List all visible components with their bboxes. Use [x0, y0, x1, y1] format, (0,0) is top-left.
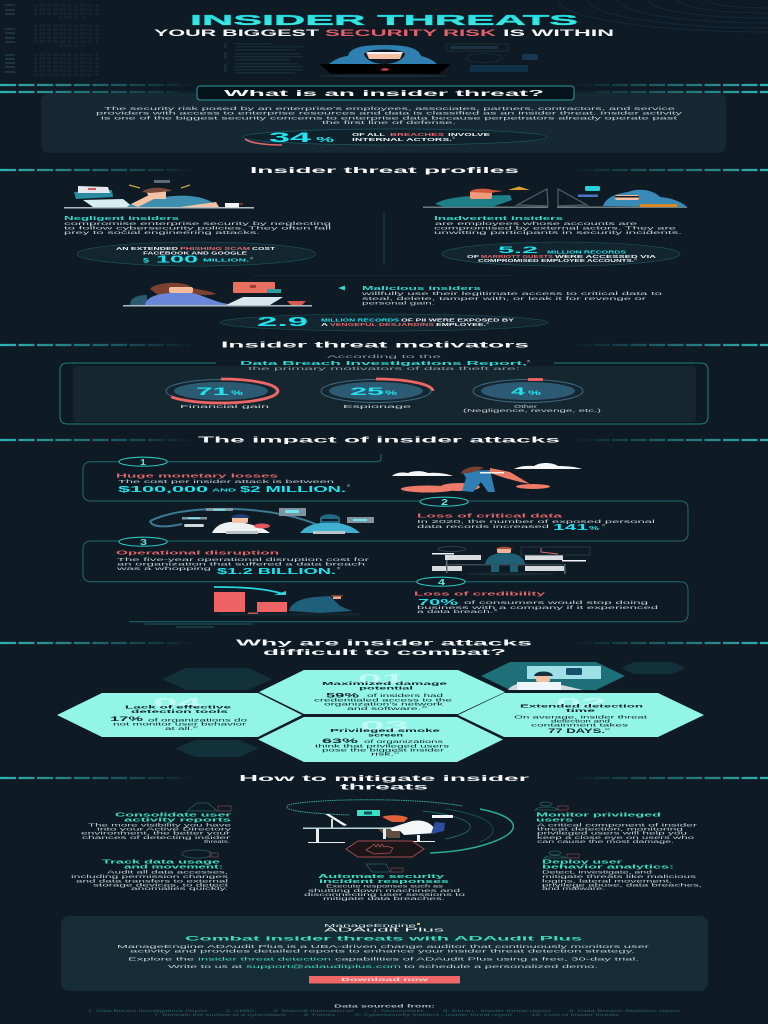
hexagon 03: privileged smoke screen: of organizations — [364, 739, 445, 744]
description: steal, delete, tamper with, or leak it for revenge or — [362, 296, 647, 301]
sources: Data sourced from: — [334, 1004, 436, 1008]
sources: 7. Beneath the surface of a cyberattack — [154, 1013, 287, 1017]
heading: negligent insiders: Negligent insiders — [64, 216, 179, 222]
heading: Combat insider threats with ADAudit Plus — [185, 937, 584, 943]
donut: espionage 25 percent: % — [385, 391, 398, 397]
decorative binary code: 1010011011 — [32, 12, 101, 17]
button: download now — [309, 976, 460, 984]
donut: other 4 percent — [473, 380, 583, 402]
donut: other 4 percent: % — [528, 391, 543, 397]
panel: monitor privileged users — [535, 802, 698, 844]
icon: arrow marker — [338, 286, 345, 290]
hexagon 03: privileged smoke screen: 03 — [360, 718, 409, 733]
heading: Track data usage — [102, 860, 220, 866]
illustration: data thief — [150, 508, 374, 534]
impact 2: critical data — [150, 497, 655, 534]
heading: Deploy user — [542, 860, 622, 866]
callout: desjardins: VENGEFUL DESJARDINS — [330, 322, 434, 327]
figure: $100,000 — [118, 485, 209, 494]
illustration: woman at desk — [123, 282, 312, 306]
icon: shield — [366, 864, 403, 872]
body text: Explore the — [128, 956, 195, 961]
description: including permission changes — [71, 874, 230, 879]
heading: why are insider attacks difficult to combat — [236, 638, 533, 657]
hexagon 03: privileged smoke screen: 63% — [322, 738, 359, 745]
body text: capabilities of ADAudit Plus using a free, 30-day trial. — [335, 956, 639, 961]
body text: insider threat detection — [198, 956, 332, 961]
sources: 2. CNBC — [226, 1009, 257, 1013]
figure: AND — [212, 487, 238, 492]
description: environment, the better your — [81, 831, 231, 836]
step badge 1: 1 — [140, 458, 147, 467]
hexagon 03: privileged smoke screen: screen — [368, 732, 403, 738]
sources: 5. Ekran - insider threat report — [443, 1009, 551, 1013]
hexagon 01: maximized damage potential: Maximized damage — [322, 681, 448, 687]
description — [417, 598, 659, 614]
description — [434, 221, 682, 235]
description — [304, 884, 466, 901]
hexagon 04: lack of effective detection tools: [11] — [193, 725, 198, 729]
callout: marriott guests: COMPROMISED EMPLOYEE ACCOUNTS. — [478, 258, 634, 263]
hexagon 01: maximized damage potential: 59% — [326, 692, 360, 699]
body text: to schedule a personalized demo. — [404, 964, 598, 969]
heading: insider threat profiles: Insider threat profiles — [250, 165, 520, 175]
label: other — [463, 404, 602, 413]
description: unwitting participants in security incidents. — [434, 230, 682, 235]
callout: marriott guests: MARRIOTT GUESTS — [481, 254, 553, 259]
decorative binary code: 1010011011 — [32, 73, 101, 78]
body text: Write to us at — [168, 964, 244, 969]
description: mitigate threats like malicious — [542, 874, 698, 879]
body text: ManageEngine ADAudit Plus is a UBA-driven change auditor that continuously monitors user — [117, 944, 650, 949]
decorative binary code: 1010011011 — [32, 61, 101, 66]
icon: analytics — [544, 851, 579, 858]
step badge 2 — [420, 497, 468, 507]
heading: and movement: — [124, 865, 224, 871]
description: The more visibility you have — [88, 822, 232, 827]
description: into your Active Directory — [97, 826, 233, 831]
panel: negligent insiders — [64, 180, 332, 266]
sources: 4. SecurityWeek — [373, 1009, 425, 1013]
icon: users — [535, 802, 568, 810]
heading — [542, 860, 675, 871]
heading: Consolidate user — [115, 812, 231, 818]
description: compromised by external actors. They are — [434, 226, 677, 231]
heading: what is an insider threat: What is an insider threat? — [224, 88, 544, 98]
label: other: Other — [514, 404, 538, 409]
description: and data transfers to external — [76, 878, 228, 883]
hexagon 04: lack of effective detection tools: at all. — [165, 726, 193, 731]
hexagon 04: lack of effective detection tools: 17% — [110, 716, 144, 723]
hexagon 02: extended detection time: time — [566, 708, 596, 714]
description: to follow cybersecurity policies. They often fall — [64, 226, 331, 231]
callout: phishing scam: PHISHING SCAM — [180, 246, 251, 251]
hexagon 04: lack of effective detection tools: detection tools — [131, 709, 229, 715]
heading — [115, 812, 231, 823]
donut: financial gain 71 percent: 71 — [196, 386, 229, 398]
hexagon 01: maximized damage potential: of insiders had — [367, 693, 444, 698]
hexagon 04: lack of effective detection tools: Lack of effective — [125, 705, 232, 711]
hexagon 01: maximized damage potential: 01 — [358, 671, 405, 686]
callout: desjardins — [220, 314, 548, 331]
heading: Loss of credibility — [414, 592, 545, 598]
step badge 1 — [119, 457, 167, 467]
description: % — [589, 526, 600, 532]
description: [7] — [602, 523, 605, 527]
heading: Huge monetary losses — [116, 474, 278, 480]
sources: 9. Cybersecurity Insiders - insider threat report — [355, 1013, 512, 1017]
sources: 6. Data Breach Statistics report — [569, 1009, 680, 1013]
panel: track data usage — [71, 850, 230, 891]
description: [8] — [337, 566, 340, 570]
hexagon 02: extended detection time: On average, insider threat — [514, 714, 649, 719]
sources — [88, 1004, 680, 1017]
definition text: The security risk posed by an enterprise's employees, associates, partners, contractors, and service — [104, 106, 676, 111]
decorative binary code: 1010011011 — [32, 4, 101, 9]
icon: reports — [187, 803, 231, 811]
illustration: employee and hacker — [423, 186, 687, 208]
impact 3: operational disruption — [116, 537, 590, 576]
logo: manageengine adaudit plus: ManageEngine — [324, 923, 418, 928]
hexagon 04: lack of effective detection tools: of organizations do — [148, 717, 248, 722]
callout: phishing scam: MILLION. — [203, 258, 249, 262]
description — [81, 822, 233, 844]
callout: 34 percent: BREACHES — [390, 132, 444, 137]
callout: marriott guests: 5.2 — [498, 245, 538, 256]
heading — [536, 812, 661, 823]
heading: insider threat motivators: Insider threat motivators — [221, 340, 530, 350]
heading: behavior analytics: — [542, 865, 675, 871]
callout: marriott guests: OF — [467, 254, 480, 259]
callout: 34 percent: INVOLVE — [448, 132, 490, 137]
callout: phishing scam: AN EXTENDED — [116, 246, 178, 251]
description: logins, lateral movement, — [542, 878, 672, 883]
divider: profiles vertical — [383, 212, 385, 265]
description: The five-year operational disruption cost for — [117, 557, 370, 562]
callout: phishing scam: COST — [252, 246, 276, 251]
callout: 34 percent: 34 — [269, 129, 312, 145]
description: A critical component of insider — [537, 822, 698, 827]
sources: 3. Marriott International — [273, 1009, 354, 1013]
panel: call to action — [61, 916, 708, 991]
definition text: providers with access to enterprise resources and data is classified as an insider threat. Insider activity — [96, 111, 684, 116]
panel: motivators — [60, 354, 708, 424]
description: [9] — [494, 608, 497, 612]
hexagon 04: lack of effective detection tools — [57, 693, 302, 737]
heading: activity reports — [124, 817, 231, 823]
description — [417, 519, 655, 532]
heading: incident responses — [319, 879, 449, 885]
subtitle: YOUR BIGGEST — [154, 28, 319, 39]
panel: inadvertent insiders — [423, 186, 687, 266]
body text: support@adauditplus.com — [246, 964, 401, 969]
intro text: According to the — [327, 354, 443, 359]
hexagon 02: extended detection time: [12] — [605, 727, 610, 731]
intro text: Data Breach Investigations Report, — [240, 361, 529, 367]
decorative binary code: 1011 — [57, 16, 88, 21]
description: a data breach. — [417, 609, 493, 614]
subtitle: IS WITHIN — [503, 28, 614, 39]
heading: Loss of critical data — [417, 514, 562, 520]
illustration: worker with stop sign — [287, 800, 513, 857]
figure — [118, 484, 350, 494]
decorative binary code: 1011 — [57, 44, 88, 49]
description: threats. — [204, 839, 230, 844]
description: storage devices, to detect — [93, 882, 230, 887]
decorative binary code: 1010011011 — [32, 28, 101, 33]
description — [542, 870, 702, 891]
description: In 2020, the number of exposed personal — [417, 519, 655, 524]
sources: 8. Forbes — [304, 1013, 336, 1017]
description: 141 — [553, 523, 589, 532]
step badge 4 — [417, 577, 465, 587]
callout: marriott guests: MILLION RECORDS — [547, 249, 626, 254]
heading — [318, 874, 449, 885]
illustration: overwhelmed worker — [432, 546, 590, 576]
description: 70% — [418, 598, 458, 607]
sources: 10. Cost of insider threats — [531, 1013, 620, 1017]
heading: inadvertent insiders: Inadvertent insiders — [434, 216, 563, 222]
callout: phishing scam: FACEBOOK AND GOOGLE — [143, 251, 247, 256]
decorative binary code: 1010011011 — [32, 24, 101, 29]
description — [64, 221, 332, 235]
callout: phishing scam: $ — [143, 258, 150, 264]
description: privileged users will help you — [537, 831, 688, 836]
intro text — [240, 354, 530, 371]
description: compromise enterprise security by neglecting — [64, 221, 332, 226]
description: are employees whose accounts are — [435, 221, 638, 226]
definition text — [96, 106, 684, 125]
description: privilege abuse, data breaches, — [542, 882, 702, 887]
description — [71, 870, 230, 891]
decorative binary code: 1010011011 — [32, 8, 101, 13]
callout: marriott guests: WERE ACCESSED VIA — [555, 254, 656, 259]
heading: what is an insider threat — [197, 86, 574, 100]
callout: desjardins: [4] — [486, 321, 489, 325]
hexagon 03: privileged smoke screen: pose the biggest insider — [322, 747, 445, 752]
hexagon 01: maximized damage potential: and software. — [347, 706, 421, 711]
description: prey to social engineering attacks. — [64, 230, 260, 235]
heading: how to mitigate insider threats — [239, 773, 531, 792]
body text — [117, 944, 650, 969]
description — [537, 822, 698, 844]
heading: how to mitigate insider threats: How to mitigate insider — [239, 773, 531, 783]
callout: phishing scam — [77, 242, 316, 266]
callout: 34 percent: OF ALL — [352, 132, 386, 137]
callout: marriott guests: [3] — [634, 257, 637, 261]
label: other: (Negligence, revenge, etc.) — [463, 408, 602, 413]
heading: Operational disruption — [116, 550, 279, 556]
illustration: falling coins — [392, 463, 582, 492]
step badge 4: 4 — [438, 578, 446, 587]
logo: manageengine adaudit plus: ADAudit Plus — [324, 928, 445, 934]
description — [362, 291, 663, 306]
callout: desjardins: A — [321, 322, 328, 327]
step badge 2: 2 — [441, 498, 449, 507]
description: shutting down machines and — [308, 888, 462, 893]
step badge 3 — [119, 537, 167, 547]
decorative binary code: 1010011011 — [32, 32, 101, 37]
donut: espionage 25 percent — [319, 379, 433, 403]
description: was a whopping — [117, 566, 212, 571]
callout: desjardins: OF PII WERE EXPOSED BY — [401, 318, 514, 322]
description: threat detection, monitoring — [537, 826, 684, 831]
hexagon 01: maximized damage potential: [10] — [422, 705, 427, 709]
body text: activity and provides detailed reports to enhance your insider threat detection strategy. — [130, 948, 635, 953]
description: anomalies quickly. — [131, 886, 228, 891]
logo: manageengine adaudit plus — [324, 923, 445, 934]
donut: financial gain 71 percent — [164, 379, 278, 403]
decorative binary code: 1010011011 — [32, 57, 101, 62]
impact 4: credibility — [145, 577, 659, 628]
heading: why are insider attacks difficult to combat: difficult to combat? — [263, 647, 506, 657]
label: financial gain: Financial gain — [180, 404, 270, 409]
donut: espionage 25 percent: 25 — [350, 386, 384, 398]
hexagon 03: privileged smoke screen: risk. — [371, 752, 394, 757]
panel: automate incident responses — [304, 864, 466, 901]
description: data records increased — [417, 524, 550, 529]
header side graphics — [224, 43, 538, 74]
heading: Automate security — [318, 874, 444, 880]
intro text: [5] — [527, 359, 530, 363]
hexagon 02: extended detection time — [458, 693, 704, 737]
button: download now: Download now — [341, 977, 429, 982]
hexagon 01: maximized damage potential: organization's network — [324, 702, 445, 707]
donut: other 4 percent: 4 — [511, 386, 527, 398]
hexagon 02: extended detection time: 02 — [556, 695, 606, 710]
description: $1.2 BILLION. — [217, 567, 336, 576]
hexagon 01: maximized damage potential: credentialed access to the — [314, 697, 453, 702]
hexagon 01: maximized damage potential — [259, 670, 505, 714]
description: can cause the most damage. — [537, 839, 674, 844]
description: disconnecting user sessions to — [304, 892, 466, 897]
divider: profiles horizontal — [255, 274, 510, 276]
subtitle: SECURITY RISK — [325, 28, 496, 39]
heading — [102, 860, 224, 871]
heading: the impact of insider attacks: The impact of insider attacks — [198, 434, 561, 444]
donut: financial gain 71 percent: % — [231, 391, 244, 397]
callout: 34 percent — [243, 129, 547, 145]
decorative binary code: 1010011011 — [32, 65, 101, 70]
callout: phishing scam: [2] — [250, 256, 253, 260]
illustration: stressed employee at laptop — [64, 180, 254, 208]
callout: desjardins: MILLION RECORDS — [321, 318, 399, 322]
description: Execute responses such as — [326, 884, 445, 889]
hexagon 03: privileged smoke screen — [258, 717, 503, 762]
title: INSIDER THREATS — [190, 12, 578, 29]
callout: 34 percent: INTERNAL ACTORS. — [352, 137, 452, 142]
panel: consolidate reports — [81, 803, 233, 844]
heading: users — [536, 817, 573, 823]
callout: desjardins: 2.9 — [257, 315, 308, 329]
decorative binary code: 1010011011 — [32, 69, 101, 74]
hexagon 01: maximized damage potential: potential — [359, 685, 413, 691]
description: mitigate data breaches. — [323, 896, 445, 901]
sources: 1. Data Breach Investigations Report — [88, 1009, 207, 1013]
decorative binary code — [5, 0, 768, 78]
decorative binary code: 1010011011 — [32, 36, 101, 41]
illustration: falling bar chart — [145, 587, 360, 628]
icon: gauge — [182, 850, 218, 858]
callout: 34 percent: [1] — [452, 136, 455, 140]
description: an organization that suffered a data breach — [117, 561, 366, 566]
hexagon 02: extended detection time: 77 DAYS. — [548, 728, 605, 735]
description: chances of detecting insider — [82, 835, 231, 840]
heading: how to mitigate insider threats: threats — [340, 782, 429, 792]
hexagon 04: lack of effective detection tools: 04 — [153, 695, 205, 710]
decorative hexagons — [162, 662, 686, 757]
icon: hooded hacker — [319, 45, 451, 78]
hexagon 02: extended detection time: detection and — [551, 718, 611, 723]
callout: desjardins: EMPLOYEE. — [436, 322, 486, 327]
hexagon 03: privileged smoke screen: [13] — [394, 750, 399, 754]
panel: what is an insider threat — [41, 86, 726, 153]
description: The cost per insider attack is between — [118, 479, 335, 484]
callout: phishing scam: 100 — [156, 254, 199, 266]
figure: [6] — [347, 484, 350, 488]
impact 1: monetary losses — [116, 457, 582, 494]
figure: $2 MILLION. — [240, 485, 346, 494]
subtitle — [154, 28, 614, 39]
callout: 34 percent: % — [316, 135, 335, 144]
heading: Monitor privileged — [536, 812, 661, 818]
description: personal gain. — [362, 300, 435, 305]
hexagon 03: privileged smoke screen: Privileged smoke — [330, 728, 441, 734]
heading: why are insider attacks difficult to combat: Why are insider attacks — [236, 638, 533, 648]
description: business with a company if it experienced — [417, 605, 659, 610]
hexagon 04: lack of effective detection tools: not monitor user behavior — [113, 722, 247, 727]
decorative binary code: 1010011011 — [32, 40, 101, 45]
description: of consumers would stop doing — [464, 600, 649, 605]
definition text: is one of the biggest security concerns to enterprise data because perpetrators already operate past — [101, 115, 679, 120]
intro text: the primary motivators of data theft are: — [248, 366, 520, 371]
connector frame: impact steps — [83, 454, 688, 622]
heading: malicious insiders: Malicious insiders — [362, 286, 481, 292]
description: and malware. — [542, 886, 605, 891]
description — [117, 557, 370, 576]
step badge 3: 3 — [140, 538, 148, 547]
hexagon 03: privileged smoke screen: think that privileged users — [315, 743, 451, 748]
description: willfully use their legitimate access to critical data to — [362, 291, 663, 296]
description: keep a close eye on users who — [537, 835, 695, 840]
panel: deploy behavior analytics — [542, 851, 702, 891]
callout: marriott guests — [442, 242, 680, 266]
definition text: the first line of defense. — [322, 120, 456, 125]
hexagon 02: extended detection time: containment takes — [531, 723, 630, 728]
illustration: analyst on hexagon — [481, 662, 625, 690]
decorative binary code: 1010011011 — [32, 53, 101, 58]
description: Detect, investigate, and — [542, 870, 653, 875]
panel: malicious insiders — [123, 282, 663, 331]
section divider bands — [0, 85, 768, 778]
description: Audit all data accesses, — [107, 870, 228, 875]
hexagon 02: extended detection time: Extended detection — [520, 704, 643, 710]
label: espionage: Espionage — [343, 404, 412, 409]
